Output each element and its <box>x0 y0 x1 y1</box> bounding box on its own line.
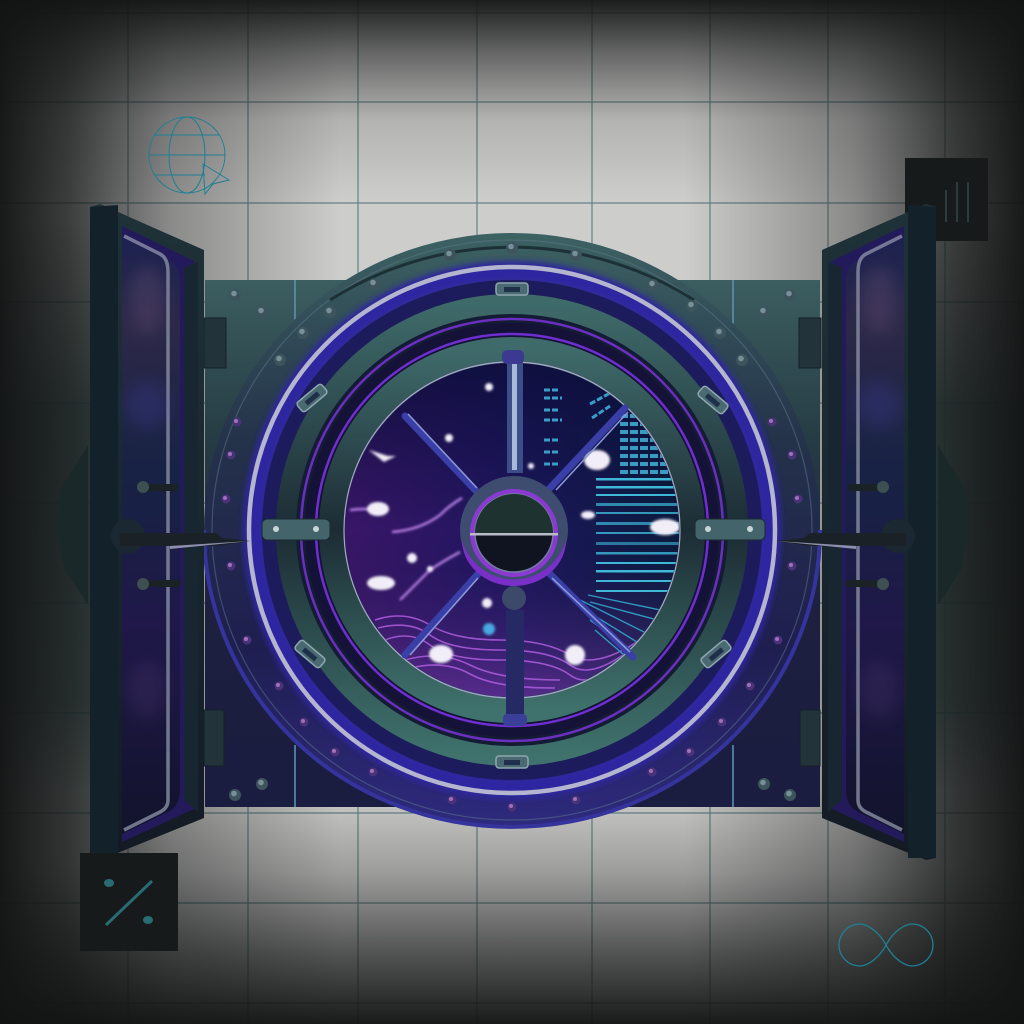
vault outer ring with rivets <box>204 233 820 827</box>
top rivets <box>506 242 518 254</box>
data streams <box>350 498 462 600</box>
inner steel ring <box>286 304 738 756</box>
ring brackets <box>294 283 732 768</box>
data panel <box>596 478 686 592</box>
icon: infinity <box>839 924 933 966</box>
hinges <box>204 318 821 766</box>
left door <box>57 204 250 860</box>
icon: dark bars tile <box>905 158 988 241</box>
wheel spokes <box>405 350 633 726</box>
side clamps <box>262 519 765 540</box>
vault back plate <box>204 280 821 807</box>
right door <box>776 204 969 860</box>
center hub <box>460 476 568 586</box>
icon: percent tile <box>80 853 178 951</box>
glowing light points <box>367 383 680 665</box>
purple rivets <box>232 418 242 426</box>
circuit waves <box>375 616 640 688</box>
window: digital city scene <box>345 363 686 697</box>
icon: globe with cursor <box>149 117 229 194</box>
glowing neon ring <box>249 267 775 793</box>
